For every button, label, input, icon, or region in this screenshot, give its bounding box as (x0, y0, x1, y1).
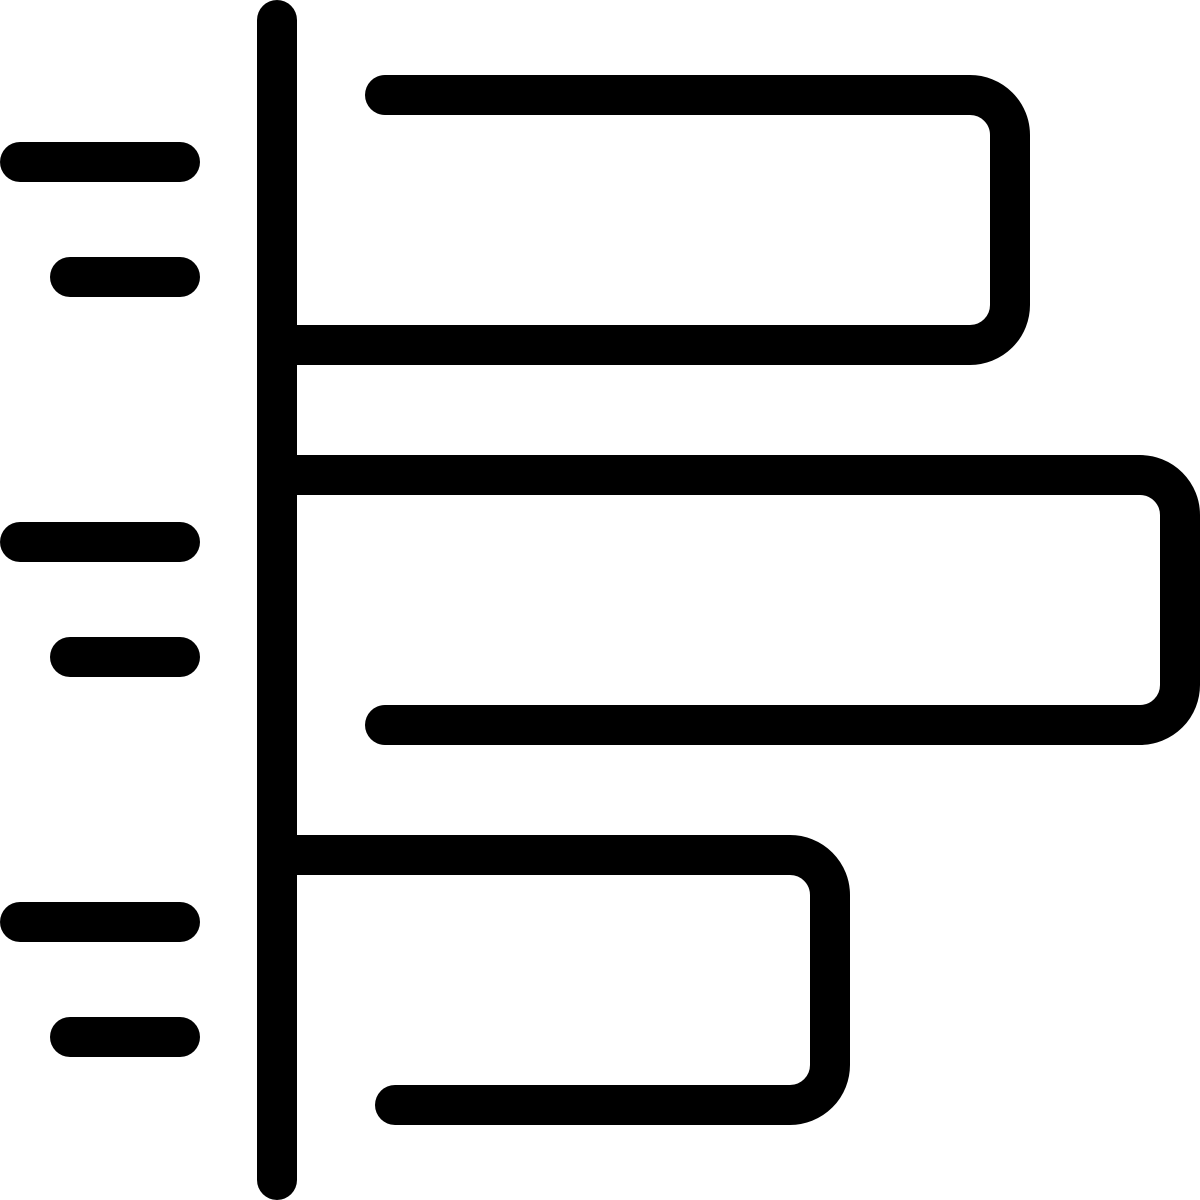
label ticks (20, 162, 180, 1037)
bar 3 (277, 855, 830, 1105)
axis line (257, 20, 297, 1180)
bar 2 (277, 475, 1180, 725)
bar 1 (277, 95, 1010, 345)
